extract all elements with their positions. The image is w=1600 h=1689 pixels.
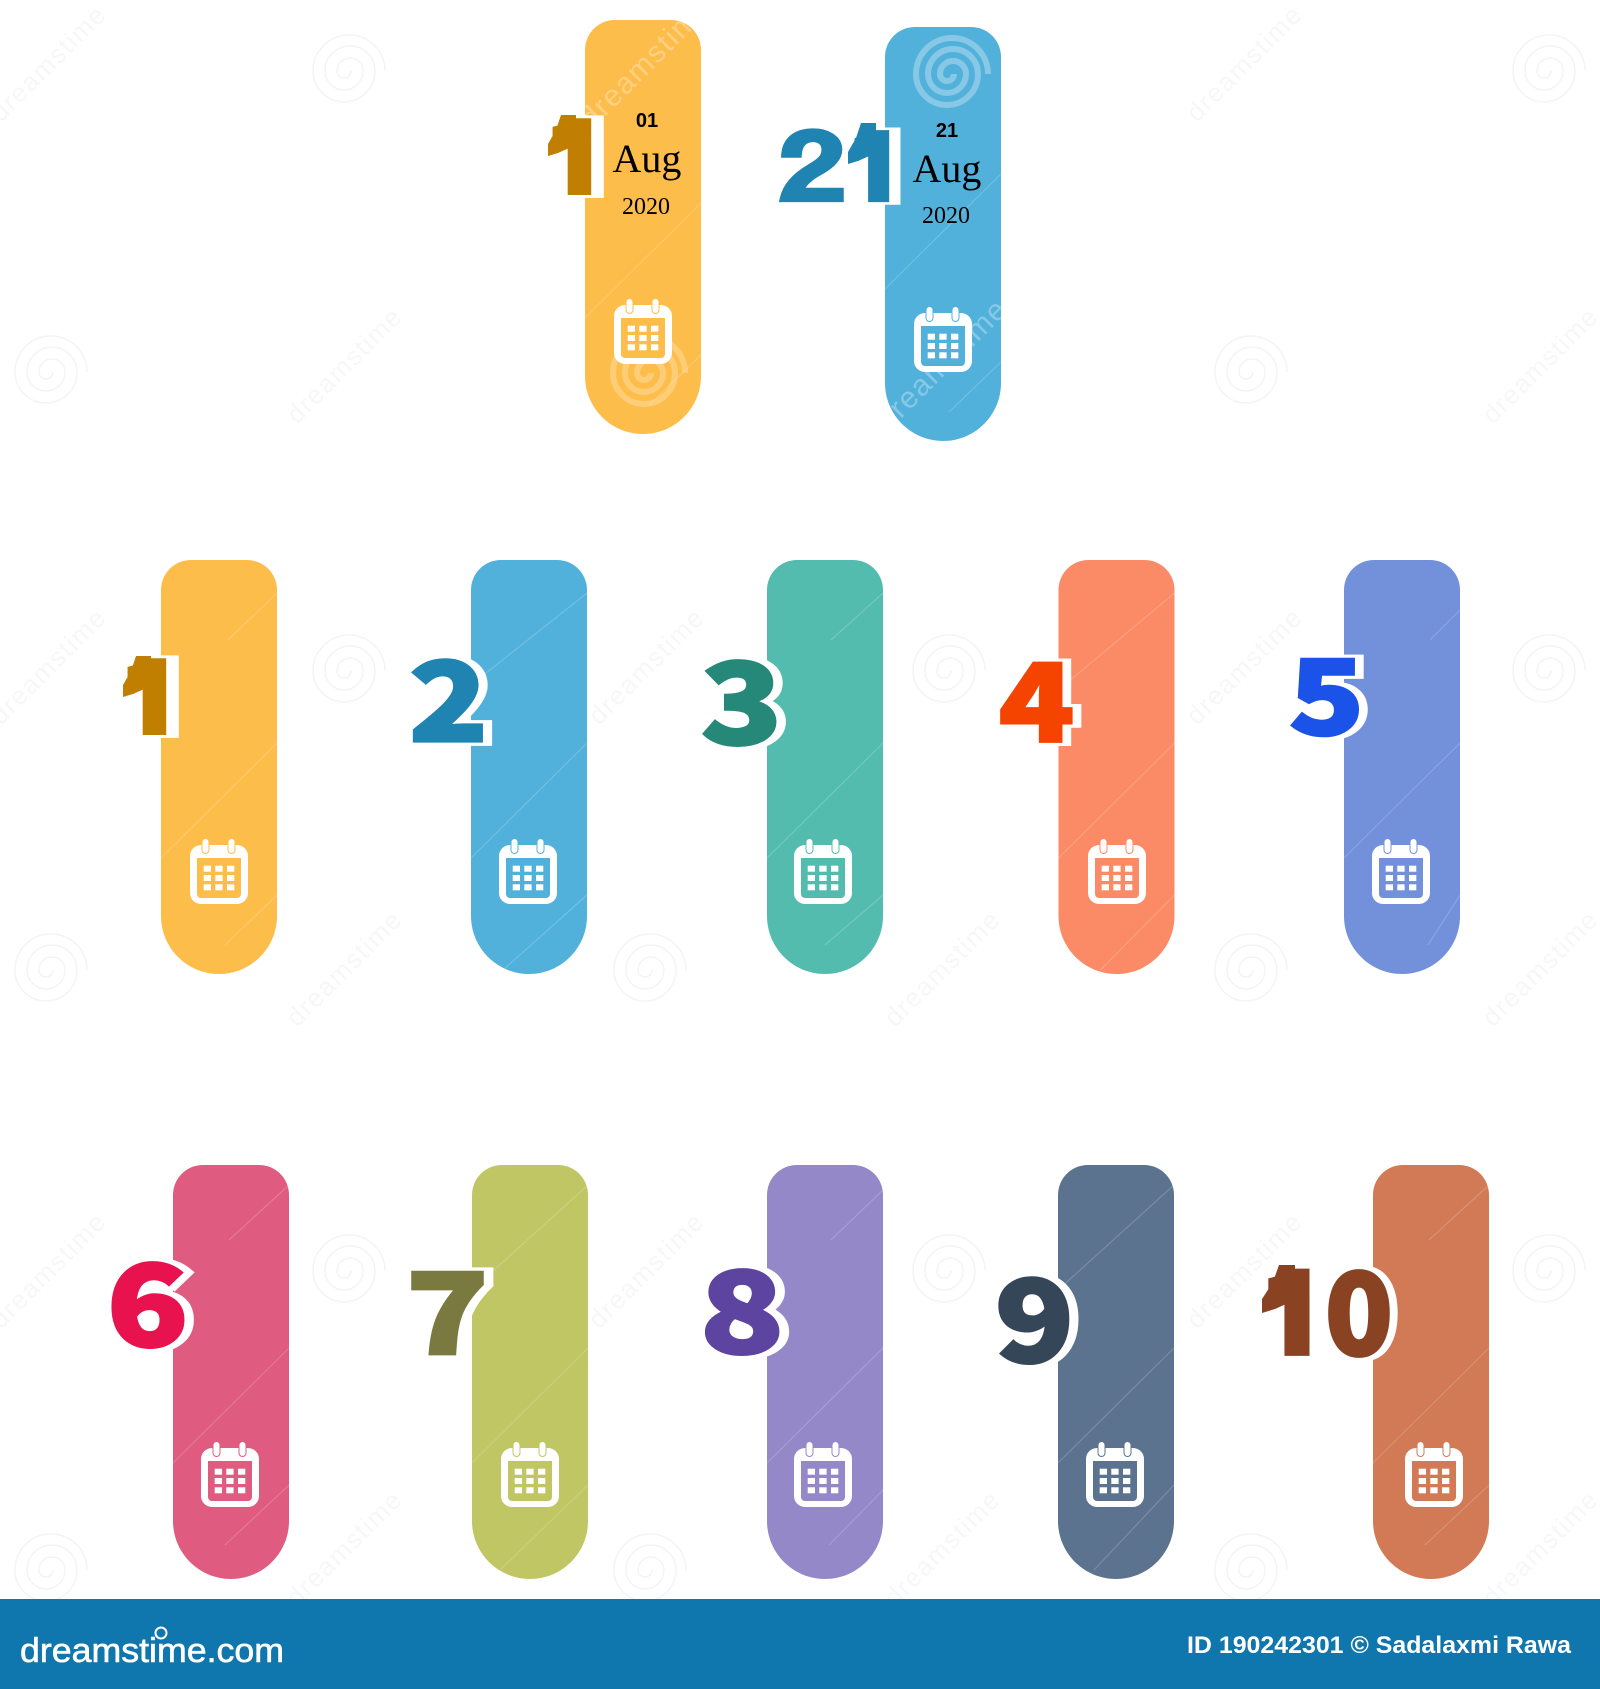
panel: step 7: 7 [412,1223,494,1387]
watermark background: dreamstime [1180,603,1307,730]
watermark background: dreamstime [280,905,407,1032]
panel: step 1: 1 [116,650,188,748]
panel: step 6 [107,1165,289,1579]
panel: step 5: 5 [1294,614,1369,764]
panel: step 1 [116,560,277,974]
panel: step 4 [999,560,1174,974]
panel: step 10 [1256,1165,1489,1579]
panel: step 4: 4 [999,617,1074,773]
panel: date 01 Aug 2020: 1 [541,110,613,208]
watermark background: dreamstime [1476,905,1600,1032]
watermark background: dreamstime [1476,302,1600,429]
panel: step 2: 2 [409,613,488,773]
panel: step 3 [701,560,883,974]
panel: date 01 Aug 2020: 1 [550,110,622,208]
panel: step 8: 8 [700,1223,784,1386]
watermark background: dreamstime [582,603,709,730]
panel: date 21 Aug 2020: 21 [936,120,958,142]
panel: step 6: 6 [113,1215,194,1379]
panel: date 21 Aug 2020: 21 [780,123,909,214]
panel: step 10: 0 [1325,1224,1393,1388]
panel: step 1: 1 [125,650,197,748]
panel: date 01 Aug 2020 [541,0,717,434]
panel: step 10: 1 [1256,1260,1333,1371]
panel: step 7: 7 [406,1223,489,1387]
panel: date 21 Aug 2020: Aug [913,146,981,191]
panel: step 2 [409,560,587,974]
watermark background: dreamstime [280,1485,407,1612]
panel: date 01 Aug 2020: 2020 [622,194,670,220]
panel: step 3: 3 [701,613,782,777]
panel: step 6: 6 [107,1215,188,1379]
watermark background: dreamstime [878,905,1005,1032]
panel: step 5: 5 [1289,614,1364,764]
panel: step 8: 8 [706,1223,790,1386]
panel: date 21 Aug 2020: dreamstime [870,294,1013,437]
logo: dreamstime.com: dreamstime.com [20,1632,284,1670]
watermark background: dreamstime [1180,0,1307,127]
panel: date 21 Aug 2020: 21 [788,123,917,214]
panel: date 21 Aug 2020 [780,27,1013,441]
panel: step 5 [1289,560,1460,974]
watermark background: dreamstime [280,302,407,429]
panel: step 3: 3 [707,613,788,777]
watermark background: dreamstime [1476,1485,1600,1612]
panel: date 01 Aug 2020: 01 [636,110,658,132]
footer bar [0,1599,1600,1689]
watermark background: dreamstime [582,1207,709,1334]
panel: step 2: 2 [414,613,493,773]
credit text: ID 190242301 © Sadalaxmi Rawa [1187,1632,1572,1659]
panel: step 9: 9 [995,1230,1074,1396]
panel: date 01 Aug 2020: Aug [613,136,681,181]
panel: step 9: 9 [1000,1230,1079,1396]
panel: step 7 [406,1165,588,1579]
panel: step 8 [700,1165,883,1579]
panel: step 10: 0 [1330,1224,1398,1388]
panel: step 4: 4 [1004,617,1079,773]
panel: step 9 [995,1165,1174,1579]
watermark background: dreamstime [1180,1207,1307,1334]
panel: date 21 Aug 2020: 2020 [922,203,970,229]
watermark background: dreamstime [878,1485,1005,1612]
